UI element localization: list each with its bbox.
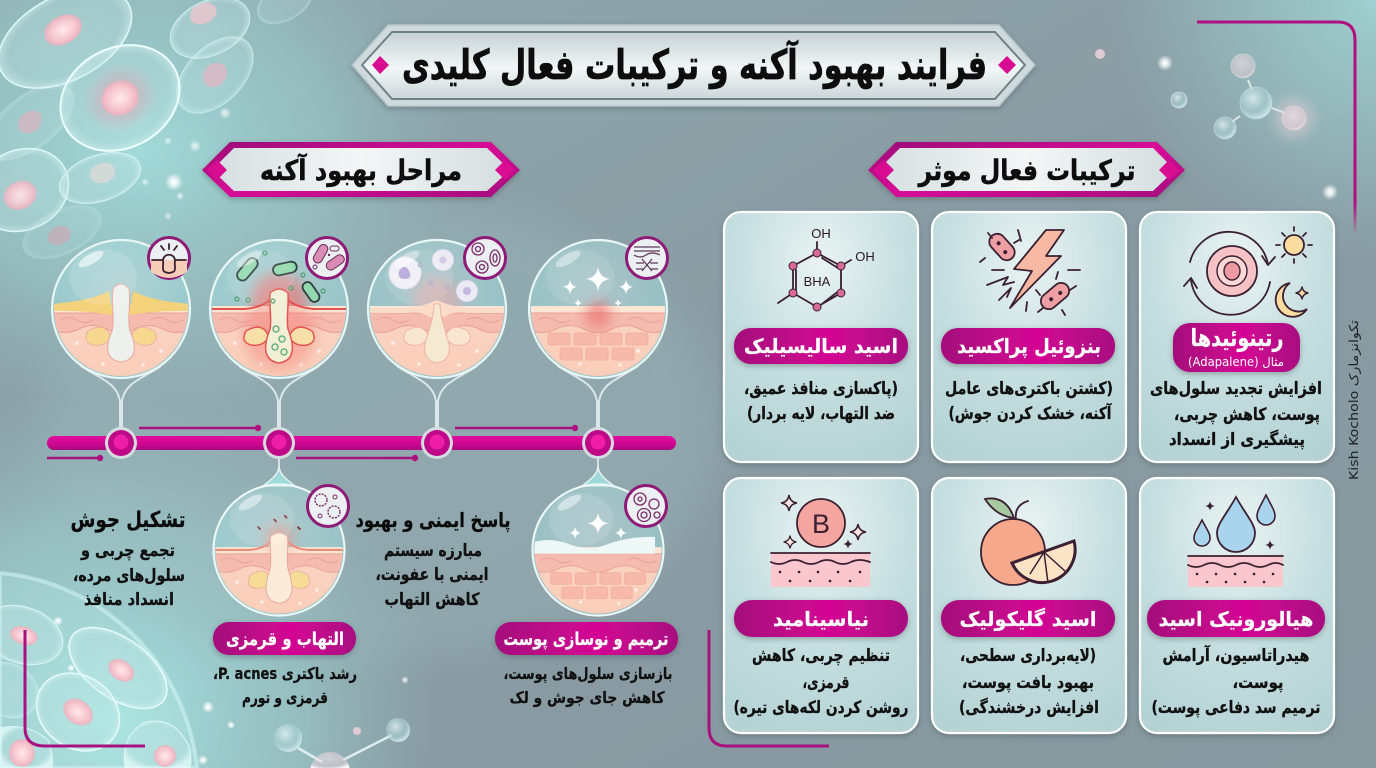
card body text: [744, 379, 898, 424]
stage 4 badge: [626, 238, 668, 278]
card body text: قرمزی،: [802, 673, 850, 693]
icon: orange and slice: [981, 498, 1075, 585]
stage text: pimple formation: انسداد منافذ: [84, 590, 174, 610]
stage 3 badge: [464, 238, 506, 278]
title plaque: [352, 25, 1035, 106]
stage 4 bubble: healing: [528, 240, 668, 443]
corner bracket bottom middle: [709, 630, 829, 746]
card body text: [734, 646, 908, 718]
icon: cell cycle with sun and moon: [1184, 227, 1312, 317]
card body text: [945, 379, 1113, 424]
watermark vertical: تکوانزمارک Kish Kocholo: [1346, 319, 1362, 480]
stage 2 bubble: inflammation and bacteria: [209, 240, 349, 443]
decoration: molecule top right: [1095, 49, 1338, 200]
stage text: pimple formation: [70, 508, 186, 610]
section heading: active ingredients: [868, 142, 1185, 197]
lower bubble badge: renewal: [626, 486, 666, 526]
stage 2 badge: [306, 238, 348, 278]
pill: hyaluronic acid: هیالورونیک اسید: [1158, 607, 1314, 631]
lower bubble: renewal: [532, 443, 664, 618]
icon: vitamin B over skin: B: [812, 509, 830, 539]
card body text: هیدراتاسیون، آرامش: [1162, 644, 1310, 666]
pill: retinoids: رتینوئیدها: [1190, 324, 1284, 352]
pill: niacinamide: نیاسینامید: [773, 607, 869, 631]
pill: salicylic acid: اسید سالیسیلیک: [744, 334, 898, 358]
card body text: افزایش درخشندگی): [959, 697, 1099, 718]
pill: glycolic acid: اسید گلیکولیک: [960, 607, 1096, 631]
stage text: pimple formation: تشکیل جوش: [70, 508, 186, 533]
title text: فرایند بهبود آکنه و ترکیبات فعال کلیدی: [402, 40, 987, 90]
title diamonds: [372, 56, 1016, 74]
card body text: روشن کردن لکه‌های تیره): [734, 698, 908, 718]
text: renewal: بازسازی سلول‌های پوست،: [504, 664, 672, 684]
icon: BHA molecule: OH: [811, 226, 831, 241]
pill: retinoids: [1173, 323, 1300, 372]
card body text: [1152, 644, 1320, 718]
card body text: (لایه‌برداری سطحی،: [960, 646, 1096, 666]
stage 1 badge: [148, 238, 190, 278]
card body text: ترمیم سد دفاعی پوست): [1152, 698, 1320, 718]
stage 3 bubble: immune response: [367, 240, 507, 443]
card body text: آکنه، خشک کردن جوش): [948, 402, 1112, 424]
stage text: immune response: [356, 508, 510, 610]
bar: [47, 436, 676, 450]
decoration: molecule bottom: [274, 718, 410, 768]
card body text: (کشتن باکتری‌های عامل: [945, 379, 1113, 399]
card body text: [1150, 379, 1322, 450]
text: renewal: [504, 664, 672, 707]
card body text: بهبود بافت پوست،: [962, 673, 1094, 693]
stage text: immune response: مبارزه سیستم: [384, 541, 482, 561]
section heading: acne stages: [202, 142, 520, 197]
pill: inflammation: التهاب و قرمزی: [226, 629, 344, 650]
card body text: افزایش تجدید سلول‌های: [1150, 379, 1322, 399]
card: salicylic acid: [724, 212, 918, 462]
card body text: (پاکسازی منافذ عمیق،: [744, 379, 898, 399]
icon: water drops over skin: [1188, 495, 1283, 587]
accent lines: [47, 428, 575, 458]
decoration: cells top-left: [0, 0, 320, 270]
pill: benzoyl peroxide: بنزوئیل پراکسید: [957, 334, 1101, 359]
card: niacinamide: [724, 478, 918, 733]
timeline nodes: [105, 427, 614, 459]
pill: salicylic acid: [734, 328, 908, 364]
pill: retinoids: مثال (Adapalene): [1188, 355, 1284, 369]
stage text: immune response: کاهش التهاب: [384, 590, 480, 610]
decoration: cells bottom-left: [0, 573, 409, 768]
pill: inflammation: [213, 622, 356, 655]
lower bubble badge: inflammation: [308, 486, 348, 526]
card: benzoyl peroxide: [932, 212, 1126, 462]
pill: glycolic acid: [941, 600, 1115, 637]
icon: bolt and bacteria: [980, 230, 1080, 315]
card body text: پوست،: [1232, 673, 1284, 693]
heading text: مراحل بهبود آکنه: [260, 153, 462, 187]
card: retinoids: [1140, 212, 1334, 462]
stage text: pimple formation: تجمع چربی و: [80, 541, 175, 561]
lower bubble: inflammation: [212, 443, 346, 618]
card body text: پوست، کاهش چربی،: [1174, 405, 1320, 425]
stage text: pimple formation: سلول‌های مرده،: [73, 566, 185, 586]
card body text: ضد التهاب، لایه بردار): [747, 404, 895, 424]
heading text: ترکیبات فعال موثر: [917, 154, 1136, 187]
pill: hyaluronic acid: [1147, 600, 1325, 637]
card: hyaluronic acid: [1140, 478, 1334, 733]
pill: niacinamide: [734, 600, 908, 637]
text: inflammation: [213, 664, 357, 707]
icon: BHA molecule: [778, 226, 875, 311]
card body text: [959, 646, 1099, 718]
card body text: تنظیم چربی، کاهش: [752, 646, 890, 666]
text: renewal: کاهش جای جوش و لک: [510, 688, 665, 707]
icon: BHA molecule: OH: [855, 249, 875, 264]
stage text: immune response: پاسخ ایمنی و بهبود: [356, 508, 510, 533]
text: inflammation: رشد باکتری P. acnes،: [213, 664, 357, 683]
timeline: [47, 425, 676, 461]
text: inflammation: قرمزی و تورم: [242, 688, 328, 707]
pill: benzoyl peroxide: [941, 328, 1115, 364]
corner bracket top right: [1197, 22, 1355, 235]
pill: renewal: [495, 622, 678, 655]
card body text: پیشگیری از انسداد: [1169, 429, 1305, 450]
stage text: immune response: ایمنی با عفونت،: [376, 565, 488, 585]
pill: renewal: ترمیم و نوسازی پوست: [504, 629, 668, 650]
icon: BHA molecule: BHA: [804, 274, 831, 289]
icon: vitamin B over skin: [771, 495, 870, 587]
stage 1 bubble: pimple formation: [51, 240, 191, 443]
card: glycolic acid: [932, 478, 1126, 733]
corner bracket bottom left: [25, 630, 145, 746]
